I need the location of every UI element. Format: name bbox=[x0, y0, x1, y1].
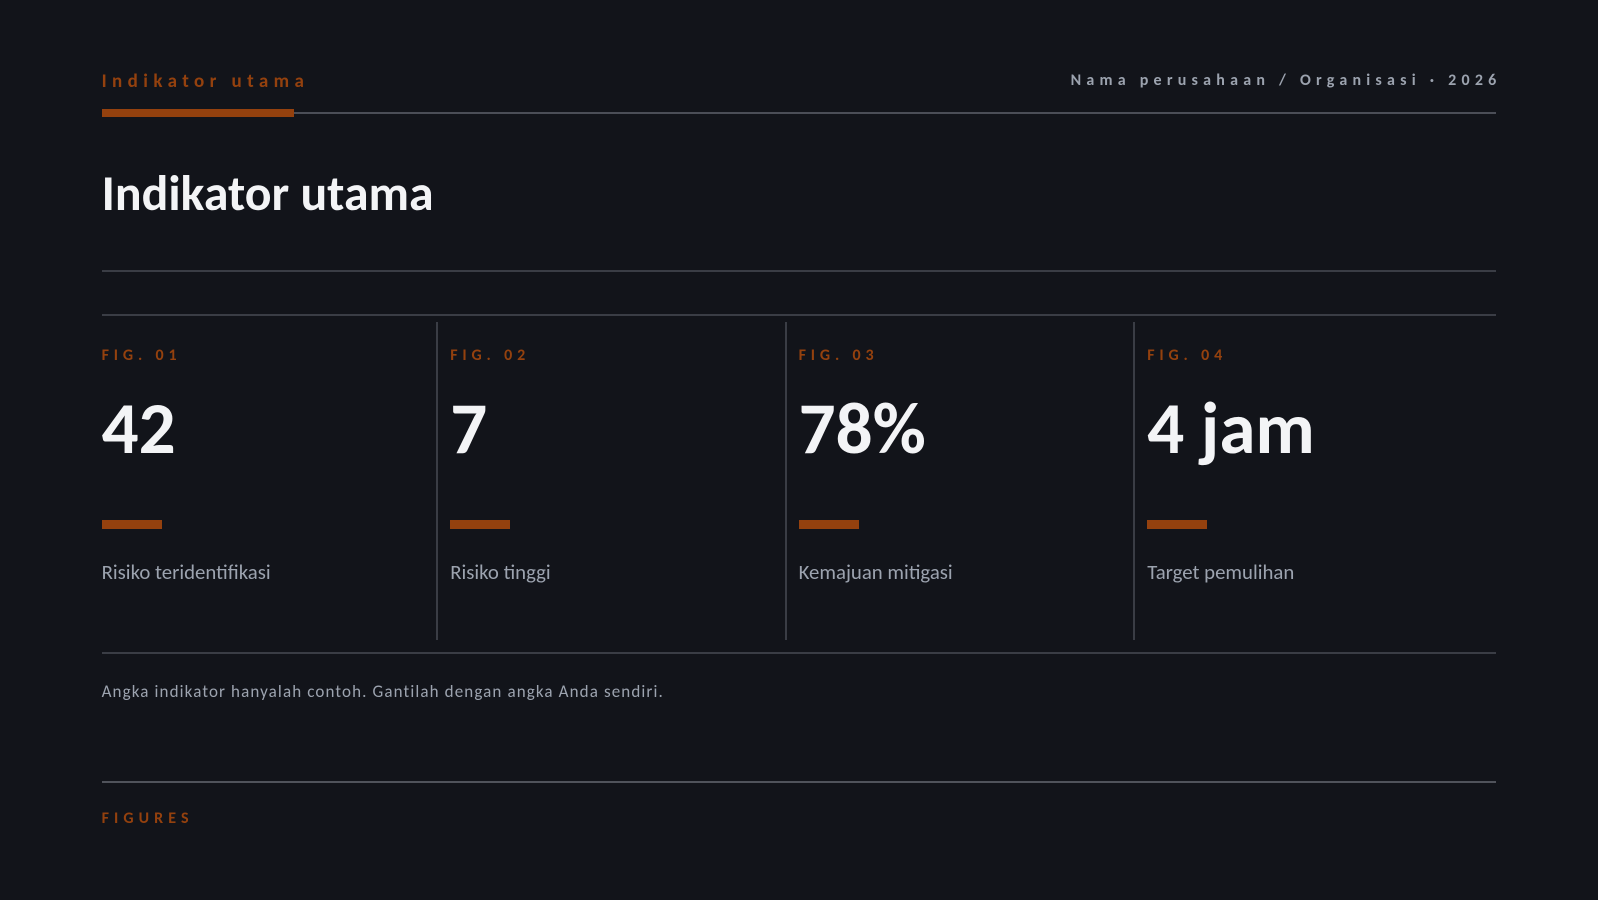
footer label: FIGURES bbox=[102, 808, 194, 828]
figure 4 value: 4 jam bbox=[1147, 383, 1315, 473]
header label: Indikator utama bbox=[102, 70, 309, 92]
panel: figure 2 bbox=[450, 346, 551, 585]
figure 1 tag: FIG. 01 bbox=[102, 346, 181, 364]
figure 1 accent bbox=[102, 520, 162, 528]
title: Indikator utama bbox=[102, 164, 434, 224]
figure 4 accent bbox=[1147, 520, 1207, 528]
header accent bar bbox=[102, 109, 294, 117]
panel: figure 4 bbox=[1147, 346, 1315, 585]
figure 3 value: 78% bbox=[799, 383, 926, 473]
figure 1 label: Risiko teridentifikasi bbox=[102, 559, 271, 585]
panel: figure 3 bbox=[799, 346, 953, 585]
title rule bbox=[102, 270, 1496, 272]
divider 2 bbox=[785, 322, 787, 640]
figure 2 accent bbox=[450, 520, 510, 528]
figure 3 accent bbox=[799, 520, 859, 528]
rule below figures bbox=[102, 652, 1496, 654]
panel: figure 1 bbox=[102, 346, 271, 585]
footnote: Angka indikator hanyalah contoh. Gantilah dengan angka Anda sendiri. bbox=[102, 680, 664, 702]
figure 3 label: Kemajuan mitigasi bbox=[799, 559, 953, 585]
figure 1 value: 42 bbox=[102, 383, 176, 473]
divider 3 bbox=[1133, 322, 1135, 640]
figure 2 value: 7 bbox=[450, 383, 487, 473]
organisation and year: Nama perusahaan / Organisasi · 2026 bbox=[1071, 71, 1502, 90]
header rule bbox=[102, 112, 1496, 114]
divider 1 bbox=[436, 322, 438, 640]
figure 3 tag: FIG. 03 bbox=[799, 346, 878, 364]
figure 4 tag: FIG. 04 bbox=[1147, 346, 1227, 364]
figure 2 label: Risiko tinggi bbox=[450, 559, 551, 585]
footer rule bbox=[102, 781, 1496, 783]
rule above figures bbox=[102, 314, 1496, 316]
figure 2 tag: FIG. 02 bbox=[450, 346, 530, 364]
figure 4 label: Target pemulihan bbox=[1147, 559, 1294, 585]
